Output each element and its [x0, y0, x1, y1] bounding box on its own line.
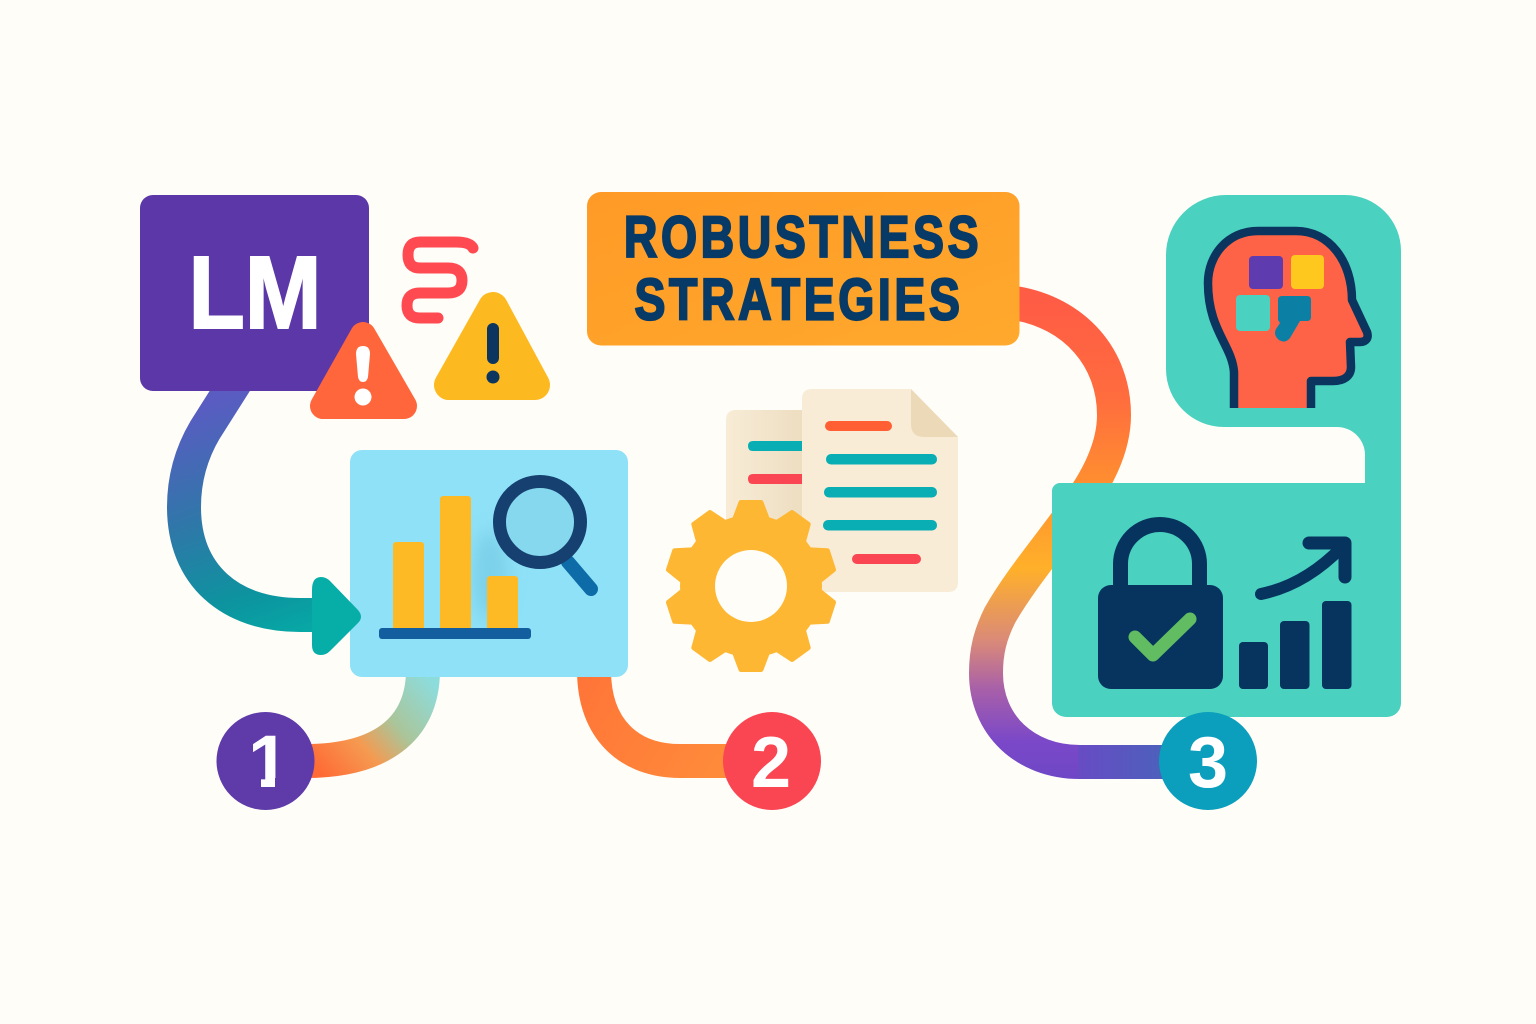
badge: 2 [723, 712, 821, 810]
badge: 3: 3 [1188, 723, 1228, 803]
badge: 1 [216, 712, 314, 810]
icon: magnifier [500, 482, 591, 589]
badge: 2: 2 [751, 723, 791, 803]
connector stem: LM to analysis [184, 370, 320, 615]
title text: ROBUSTNESS [624, 205, 982, 270]
bar chart [379, 496, 531, 639]
icon: yellow warning triangle [449, 307, 535, 385]
icon: red warning triangle [323, 335, 404, 406]
badge: 1: 1 [248, 720, 289, 803]
icon: gear [666, 502, 836, 670]
icon: padlock [1098, 524, 1223, 689]
connector: step 2 [594, 670, 735, 761]
panel: teal connecting frame [1052, 195, 1401, 717]
LM label: LM [188, 235, 322, 350]
icon: back document [726, 410, 810, 530]
panel: title: STRATEGIES [634, 268, 964, 333]
icon: red squiggle [407, 242, 473, 318]
arrow head: LM to analysis [312, 577, 361, 655]
icon: front document [802, 389, 958, 592]
icon: head [1208, 231, 1368, 408]
panel: analysis chart [350, 450, 628, 677]
icon: growth chart [1239, 543, 1352, 689]
panel: LM box [140, 195, 369, 391]
badge: 3 [1159, 712, 1257, 810]
panel: title [587, 192, 1020, 346]
connector: step 3 [986, 303, 1175, 762]
connector: step 1 [305, 670, 423, 761]
